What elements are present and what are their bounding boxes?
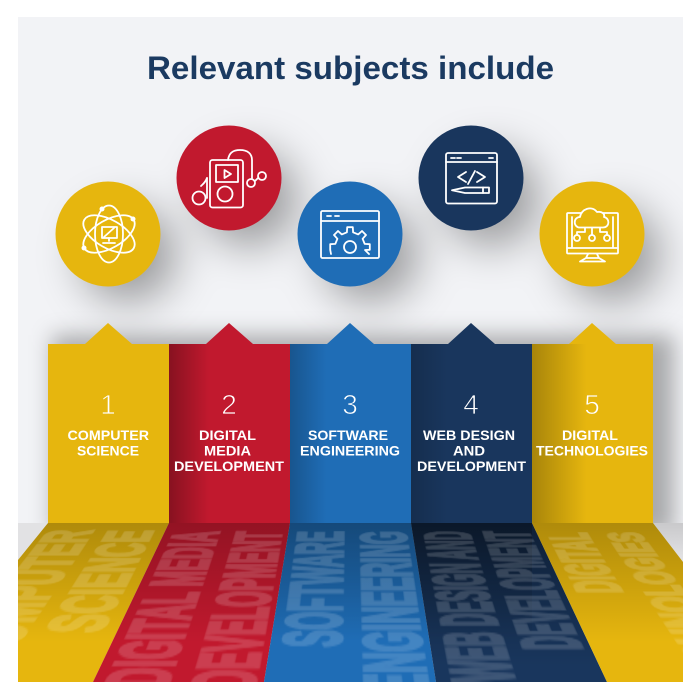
circle shadows <box>80 150 660 302</box>
column 4: web design and development: 4 <box>463 389 479 420</box>
column 2: digital media development: MEDIA <box>204 444 251 458</box>
icon: music player on red circle <box>176 126 282 230</box>
column 3: software engineering: 3 <box>342 389 358 420</box>
column 2: digital media development: DEVELOPMENT <box>174 459 285 474</box>
column 5: digital technologies: TECHNOLOGIES <box>536 444 648 458</box>
column 1: computer science <box>48 323 169 523</box>
column 3: software engineering: SOFTWARE <box>308 428 388 443</box>
column 2: digital media development: DIGITAL <box>199 428 256 443</box>
icon: browser with gear on blue circle <box>298 182 402 286</box>
column 1: computer science: 1 <box>100 389 116 420</box>
icon: cloud computing monitor on yellow circle <box>540 182 644 286</box>
column 2: digital media development <box>169 323 290 523</box>
column 1: computer science: SCIENCE <box>77 444 139 458</box>
column 5: digital technologies: 5 <box>584 389 600 420</box>
icon: atom on yellow circle <box>56 182 160 286</box>
column 5: digital technologies <box>532 323 653 523</box>
column 4: web design and development: AND <box>453 444 485 458</box>
column 3: software engineering <box>290 323 411 523</box>
columns, circles, icons and title <box>48 56 683 523</box>
column 3: software engineering: ENGINEERING <box>300 444 400 458</box>
column 4: web design and development: DEVELOPMENT <box>417 459 527 474</box>
column 4: web design and development <box>411 323 532 523</box>
floor reflected text <box>18 523 683 682</box>
icon: code window with pencil on navy circle <box>418 126 524 230</box>
column 5: digital technologies: DIGITAL <box>562 428 618 443</box>
column 4: web design and development: WEB DESIGN <box>423 428 515 443</box>
column 2: digital media development: 2 <box>221 389 237 420</box>
title: Relevant subjects include <box>147 50 554 86</box>
column 1: computer science: COMPUTER <box>68 428 149 443</box>
